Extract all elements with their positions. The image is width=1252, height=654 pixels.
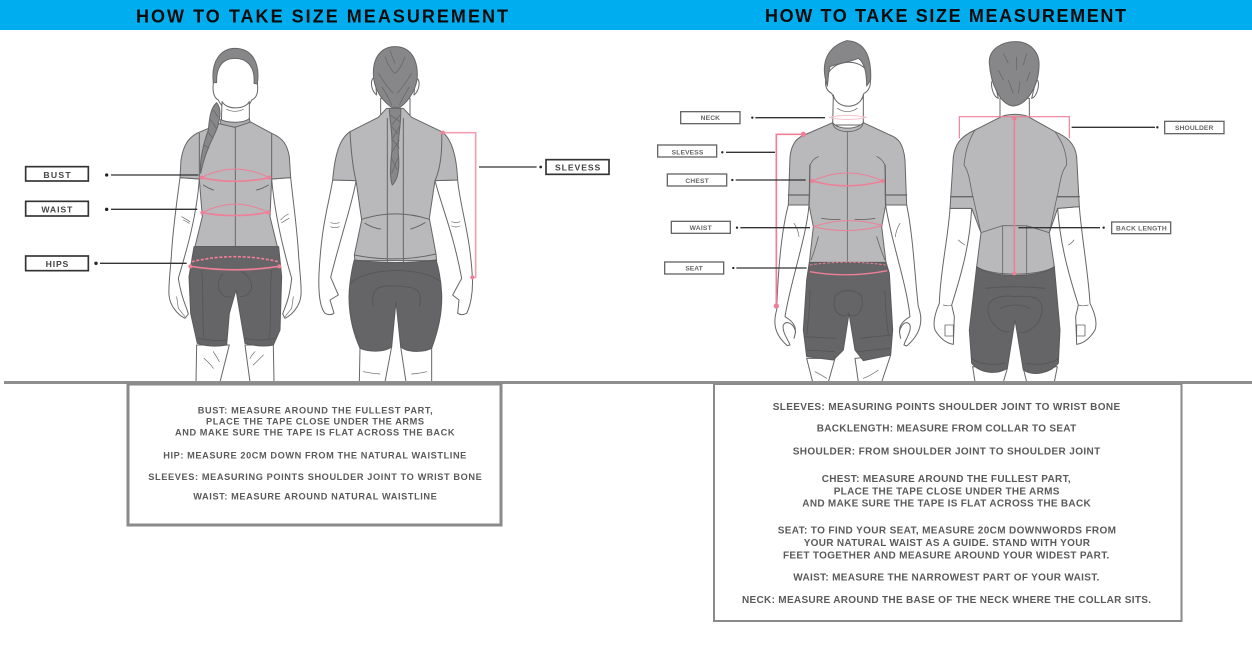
- label: chest: [667, 174, 806, 186]
- chest text: [802, 474, 1091, 510]
- hair: [824, 41, 871, 86]
- chest text: CHEST: MEASURE AROUND THE FULLEST PART,: [822, 474, 1071, 485]
- arms and legs: [319, 180, 473, 382]
- label: shoulder: [1072, 121, 1224, 134]
- bust text: AND MAKE SURE THE TAPE IS FLAT ACROSS THE BACK: [175, 428, 455, 438]
- label: seat: [665, 262, 807, 274]
- shorts: [189, 247, 282, 346]
- label: waist: WAIST: [41, 204, 73, 214]
- sleeves text: SLEEVES: MEASURING POINTS SHOULDER JOINT TO WRIST BONE: [773, 402, 1121, 413]
- seat text: YOUR NATURAL WAIST AS A GUIDE. STAND WITH YOUR: [804, 538, 1091, 549]
- jersey: [180, 118, 291, 248]
- label: chest: CHEST: [685, 178, 709, 185]
- panel: women's instructions: [128, 384, 501, 525]
- label: neck: [681, 112, 825, 124]
- panel: men's instructions: [714, 384, 1182, 621]
- bust text: [175, 406, 455, 438]
- figure: woman back: [319, 47, 609, 382]
- measurement: neck: [829, 115, 867, 119]
- arms and legs: [934, 207, 1096, 382]
- label: waist: WAIST: [690, 225, 712, 232]
- label: shoulder: SHOULDER: [1175, 125, 1214, 132]
- shorts seams: [351, 271, 441, 307]
- seat text: SEAT: TO FIND YOUR SEAT, MEASURE 20CM DOWNWORDS FROM: [778, 525, 1116, 536]
- measurement: seat: [810, 262, 887, 275]
- header band: [0, 0, 1252, 30]
- figure: woman front: [26, 48, 301, 382]
- sleeves text: SLEEVES: MEASURING POINTS SHOULDER JOINT TO WRIST BONE: [148, 472, 482, 482]
- shorts: [349, 260, 442, 351]
- measurement: bust: [199, 169, 271, 181]
- hair: [373, 47, 417, 107]
- head and neck: [213, 57, 258, 125]
- label: sleeve: SLEVESS: [555, 162, 601, 172]
- jersey: [788, 122, 907, 263]
- chest text: AND MAKE SURE THE TAPE IS FLAT ACROSS THE BACK: [802, 499, 1091, 510]
- ears and neck: [371, 78, 419, 118]
- arms and legs: [775, 205, 921, 382]
- label: bust: BUST: [43, 170, 71, 180]
- measurement: hips: [188, 257, 281, 270]
- measurement: shoulder: [959, 117, 1069, 138]
- measurement: chest: [810, 173, 885, 186]
- measurement: waist: [813, 221, 883, 231]
- label: back length: BACK LENGTH: [1116, 225, 1167, 232]
- label: sleeve: [479, 160, 609, 174]
- waist text: WAIST: MEASURE AROUND NATURAL WAISTLINE: [193, 491, 437, 501]
- hair: [213, 48, 258, 84]
- jersey: [333, 108, 458, 263]
- shorts: [803, 262, 893, 361]
- label: back length: [1018, 222, 1171, 234]
- hair: [989, 42, 1039, 106]
- label: waist: [671, 221, 810, 233]
- label: sleeve: SLEVESS: [672, 149, 704, 156]
- jersey: [950, 114, 1079, 275]
- label: neck: NECK: [701, 115, 720, 122]
- figure: man back: [934, 42, 1224, 382]
- measurement: sleeve: [774, 132, 806, 309]
- measurement: waist: [200, 204, 270, 216]
- seat text: FEET TOGETHER AND MEASURE AROUND YOUR WIDEST PART.: [783, 550, 1110, 561]
- label: waist: [26, 201, 197, 216]
- title: left: HOW TO TAKE SIZE MEASUREMENT: [136, 6, 508, 26]
- ears and neck: [992, 80, 1038, 120]
- back length text: BACKLENGTH: MEASURE FROM COLLAR TO SEAT: [817, 424, 1076, 435]
- shorts: [969, 267, 1060, 373]
- title: right: HOW TO TAKE SIZE MEASUREMENT: [765, 6, 1126, 26]
- hip text: HIP: MEASURE 20CM DOWN FROM THE NATURAL WAISTLINE: [163, 451, 466, 461]
- shoulder text: SHOULDER: FROM SHOULDER JOINT TO SHOULDER JOINT: [793, 447, 1100, 458]
- braid: [389, 108, 401, 185]
- label: hips: HIPS: [46, 259, 69, 269]
- neck text: NECK: MEASURE AROUND THE BASE OF THE NECK WHERE THE COLLAR SITS.: [742, 595, 1151, 606]
- label: hips: [26, 256, 187, 271]
- figure: man front: [658, 41, 921, 382]
- label: bust: [26, 167, 198, 181]
- arms and legs: [169, 178, 301, 382]
- measurement: sleeve: [441, 131, 476, 279]
- measurement: back length: [1012, 117, 1016, 275]
- label: sleeve: [658, 145, 775, 157]
- braid: [200, 103, 220, 173]
- head and neck: [825, 62, 870, 125]
- bust text: BUST: MEASURE AROUND THE FULLEST PART,: [198, 406, 433, 416]
- label: seat: SEAT: [685, 266, 703, 273]
- seat text: [778, 525, 1116, 561]
- waist text: WAIST: MEASURE THE NARROWEST PART OF YOUR WAIST.: [793, 572, 1100, 583]
- bust text: PLACE THE TAPE CLOSE UNDER THE ARMS: [206, 417, 424, 427]
- ground line: [4, 381, 1252, 384]
- chest text: PLACE THE TAPE CLOSE UNDER THE ARMS: [834, 486, 1060, 497]
